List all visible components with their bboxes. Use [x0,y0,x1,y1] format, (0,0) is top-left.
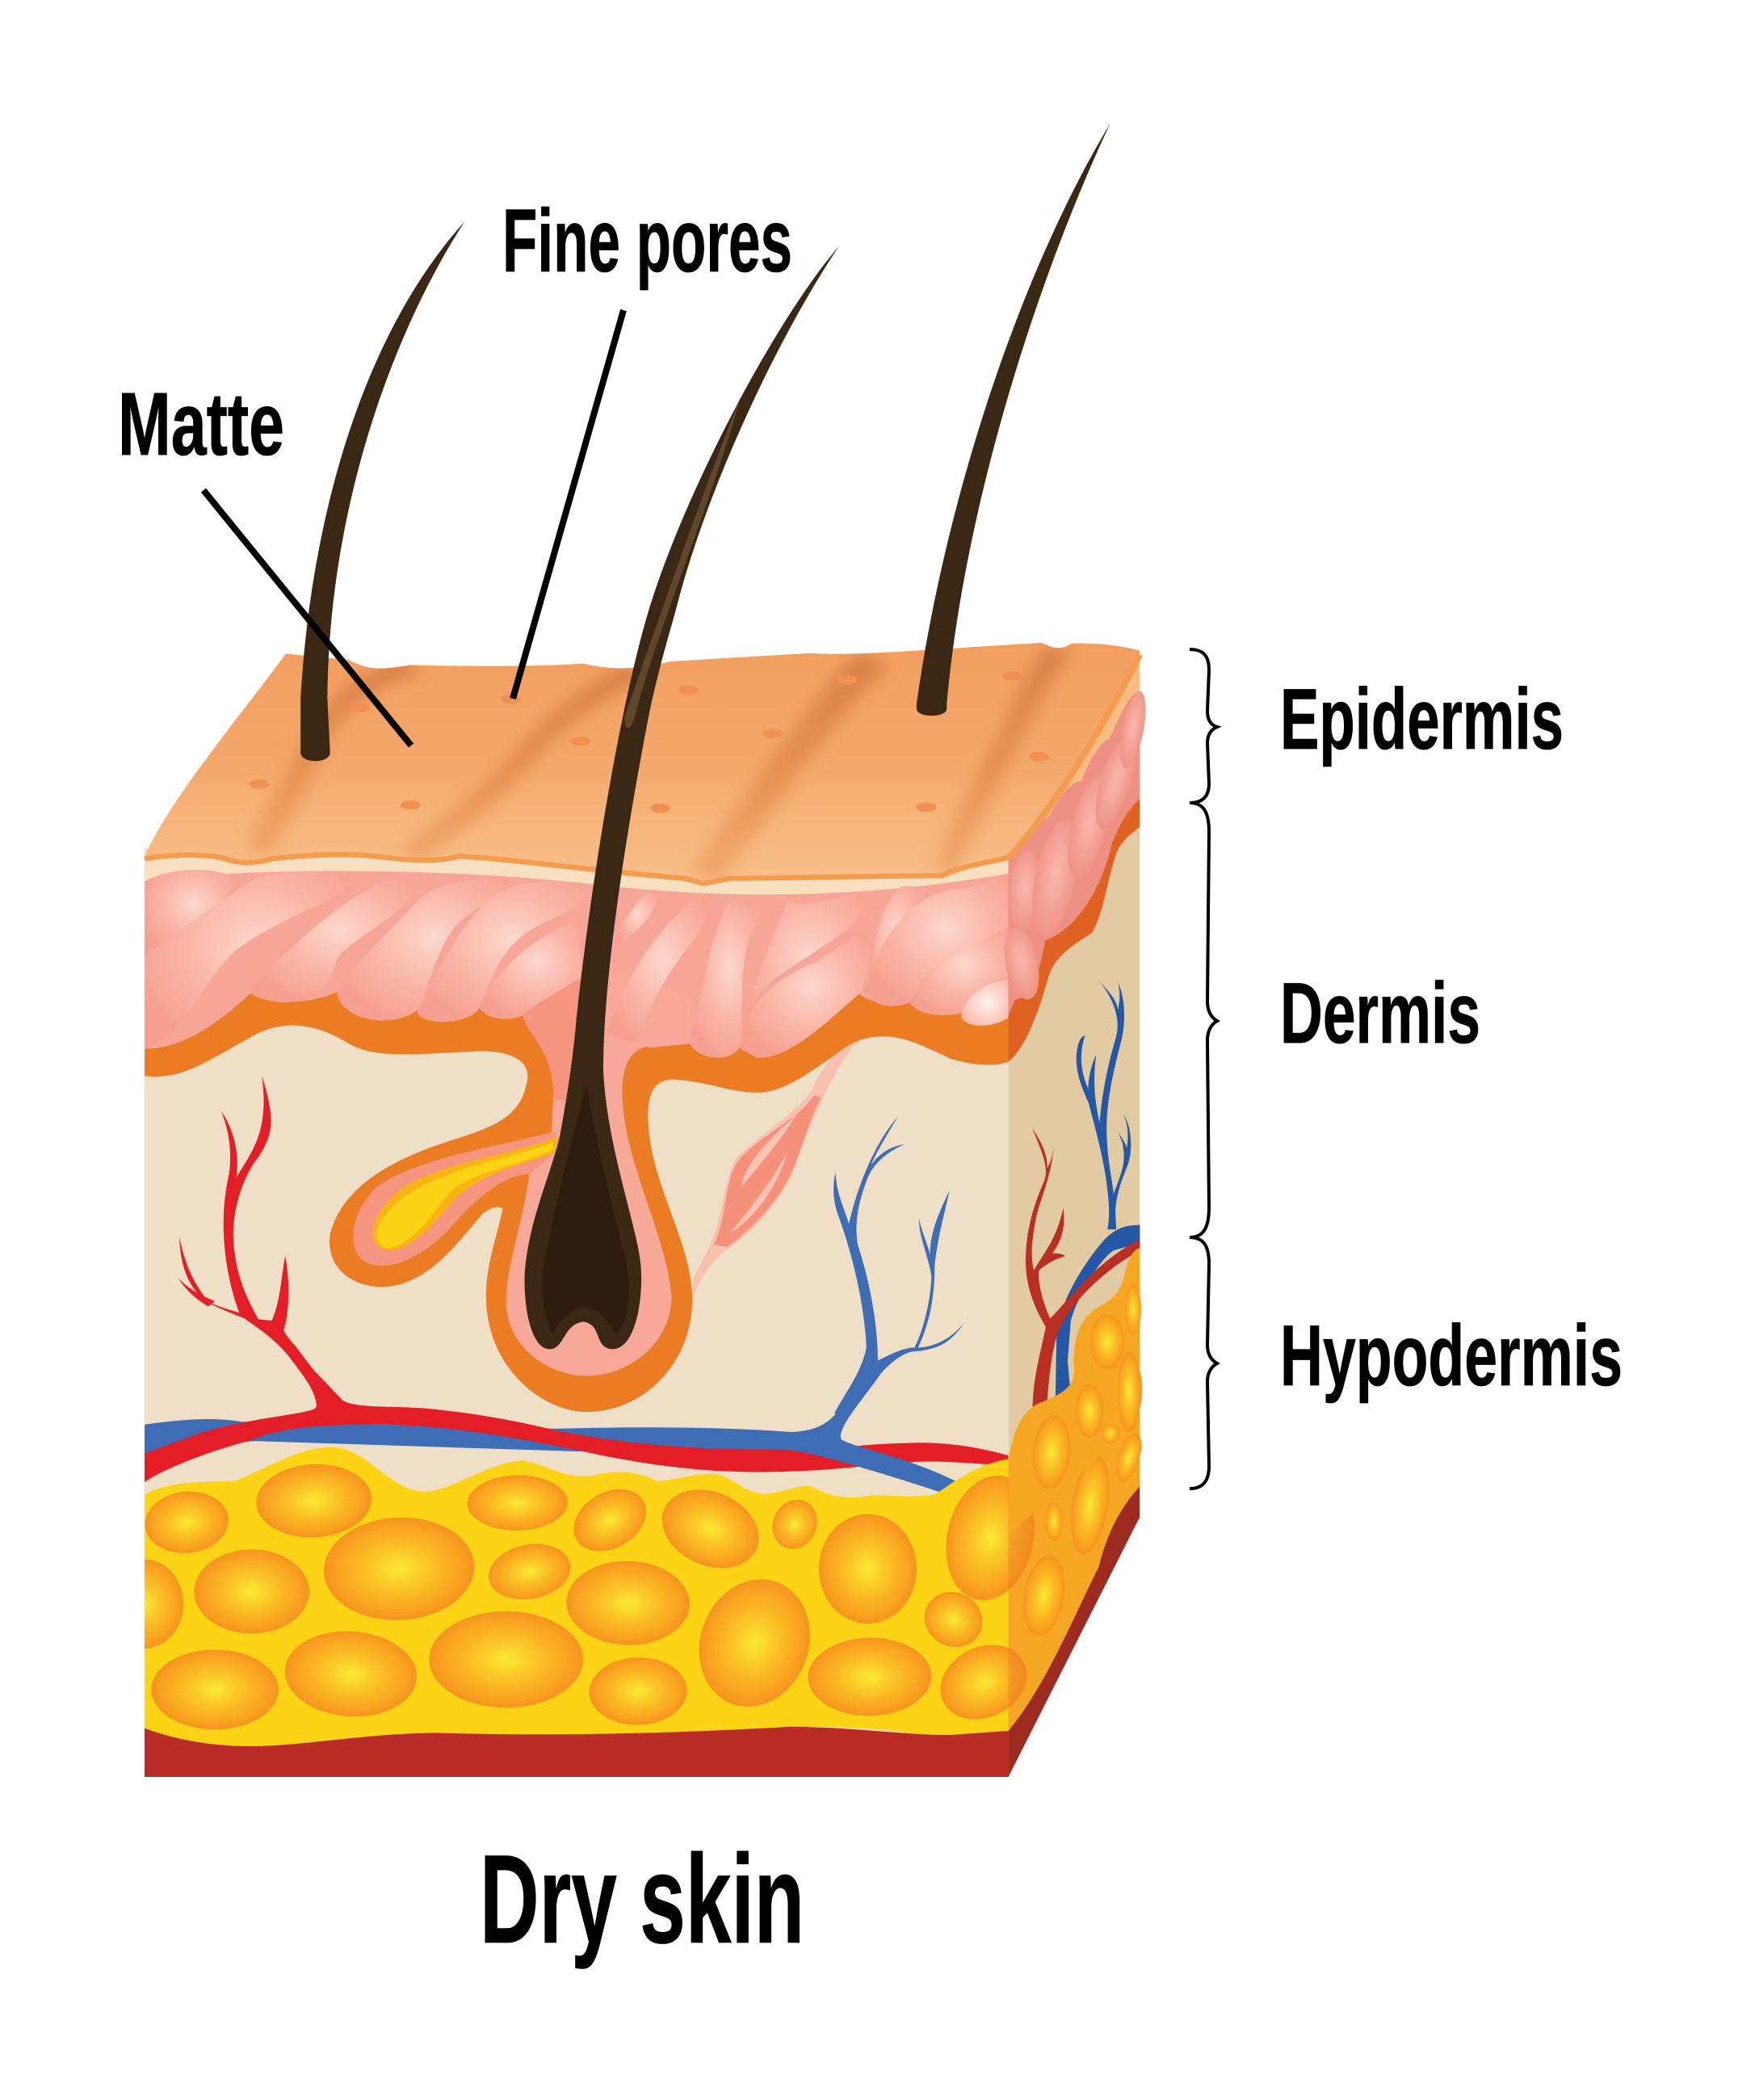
surface plane [145,643,1140,881]
skin surface, epidermis [145,124,1140,1349]
dermis front and side faces [145,662,1140,1737]
darkened part of cells on side face [1008,1478,1035,1707]
small hair, right [917,124,1110,716]
vein crossing over artery [758,1373,958,1493]
small hair, left [300,221,464,761]
lower layers: main vessels, fat, base [106,1291,1146,1777]
side peach wedge [1009,655,1140,925]
upper side fat cells [1009,1248,1141,1535]
brace: Dermis [1190,803,1217,1237]
surface creases [258,649,1059,879]
peach band under the surface [145,848,1009,972]
upper skin layers, front face and side [145,655,1151,1413]
yellow subcutaneous fat [145,1447,1009,1746]
arrector pili muscle [692,1041,858,1296]
side fat cells [1018,1357,1146,1637]
artery trunk and horizontal artery [145,1373,1009,1482]
leader line: Matte [204,490,411,746]
artery branches, front [178,1076,352,1413]
pink papillary lobes, front [145,870,1009,1058]
label: Epidermis: Epidermis [1280,670,1564,767]
hair follicle lining [506,966,691,1376]
label: Dermis: Dermis [1280,964,1480,1061]
pink papillary base [145,871,1009,1057]
side artery [1026,1128,1140,1409]
brace: Hypodermis [1190,1237,1217,1489]
horizontal vein [145,1419,825,1458]
surface lower edge line [145,655,1140,884]
front fat cells [106,1451,1043,1730]
side vein [1056,978,1140,1401]
side fat mass [1009,1291,1140,1731]
brace: Epidermis [1190,649,1217,803]
skin cross-section block [106,124,1151,1777]
side orange band [1009,799,1140,1061]
sebaceous gland [353,1132,560,1266]
label: Fine pores: Fine pores [502,191,792,291]
leader line: Fine pores [513,310,623,699]
dark red base, side [1009,1486,1140,1777]
side vessels [1026,978,1140,1409]
central hair shaft and bulb [525,246,839,1349]
pink layer on side face [999,690,1151,1015]
vein branches, front [833,1117,965,1413]
dark red base, front [145,1727,1009,1777]
title: Dry skin: Dry skin [480,1829,804,1970]
pores [249,671,1049,813]
orange basal layer with follicle and gland outline [145,935,1009,1412]
label: Matte: Matte [118,375,284,474]
